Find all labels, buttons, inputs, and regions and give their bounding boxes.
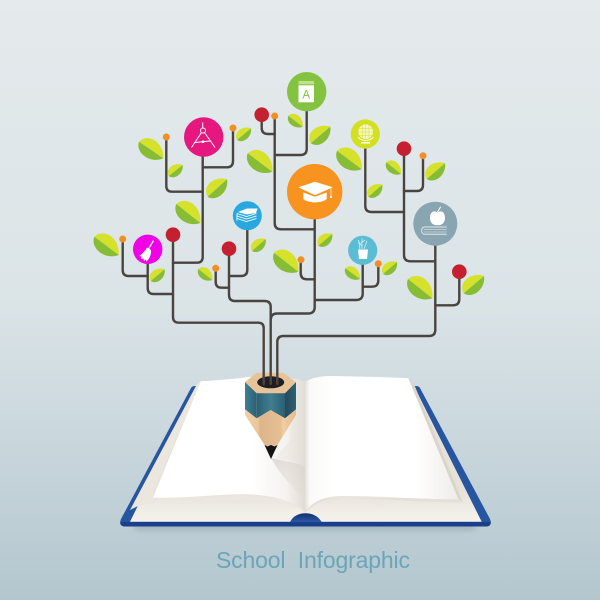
leaf bbox=[331, 142, 368, 177]
leaf bbox=[195, 264, 216, 284]
leaf bbox=[458, 269, 489, 299]
icon: apple on book bbox=[413, 202, 457, 246]
leaf bbox=[202, 173, 232, 202]
right page edge bbox=[408, 378, 463, 503]
title: School Infographic bbox=[216, 547, 410, 573]
left page edge bbox=[130, 381, 201, 510]
leaf bbox=[268, 244, 305, 279]
leaf bbox=[242, 145, 279, 179]
leaf bbox=[421, 157, 450, 184]
open book bbox=[120, 376, 491, 530]
left page under sheet bbox=[148, 496, 305, 513]
pencil top wood bbox=[245, 373, 296, 393]
book shadow bbox=[135, 524, 475, 530]
leaf bbox=[383, 157, 405, 178]
cover bottom edge bbox=[120, 522, 491, 526]
pencil middle face bbox=[257, 393, 285, 418]
pencil bbox=[245, 373, 296, 459]
pencil wood tip bbox=[245, 409, 296, 459]
leaf bbox=[342, 263, 364, 283]
icon: compass bbox=[184, 117, 223, 157]
red buds bbox=[166, 107, 467, 279]
icon: broom bbox=[133, 235, 162, 264]
pencil hole bbox=[257, 376, 284, 388]
spine notch bbox=[290, 513, 322, 522]
tree branches bbox=[123, 92, 459, 384]
icon: stacked books bbox=[233, 201, 262, 230]
leaf bbox=[233, 124, 255, 144]
leaf bbox=[305, 120, 335, 149]
pencil shadow on page bbox=[271, 458, 305, 500]
icon: pencil cup bbox=[348, 236, 377, 265]
leaf bbox=[165, 160, 186, 180]
icon: graduation cap bbox=[287, 164, 342, 219]
left page bbox=[153, 377, 305, 512]
icon: book with letter A bbox=[287, 72, 326, 111]
leaf bbox=[364, 180, 386, 201]
leaf bbox=[402, 271, 439, 306]
pencil lead bbox=[264, 445, 278, 459]
leaf bbox=[285, 111, 306, 131]
leaf bbox=[134, 133, 169, 166]
right page bbox=[305, 376, 458, 512]
leaf bbox=[248, 234, 269, 255]
icon: globe bbox=[351, 119, 380, 149]
pencil left face bbox=[245, 382, 257, 418]
leaf bbox=[89, 228, 125, 262]
icon: book with letter A: A bbox=[302, 90, 310, 102]
page block bbox=[130, 381, 482, 522]
leaf bbox=[314, 229, 336, 250]
pencil contact shading bbox=[275, 384, 303, 463]
blue book cover bbox=[120, 386, 491, 526]
tree bbox=[89, 72, 489, 384]
leaf bbox=[379, 257, 401, 278]
leaf bbox=[171, 196, 207, 230]
right page under sheet bbox=[305, 498, 462, 513]
pencil right face bbox=[285, 382, 296, 418]
leaf bbox=[147, 265, 168, 285]
orange buds bbox=[119, 112, 426, 272]
